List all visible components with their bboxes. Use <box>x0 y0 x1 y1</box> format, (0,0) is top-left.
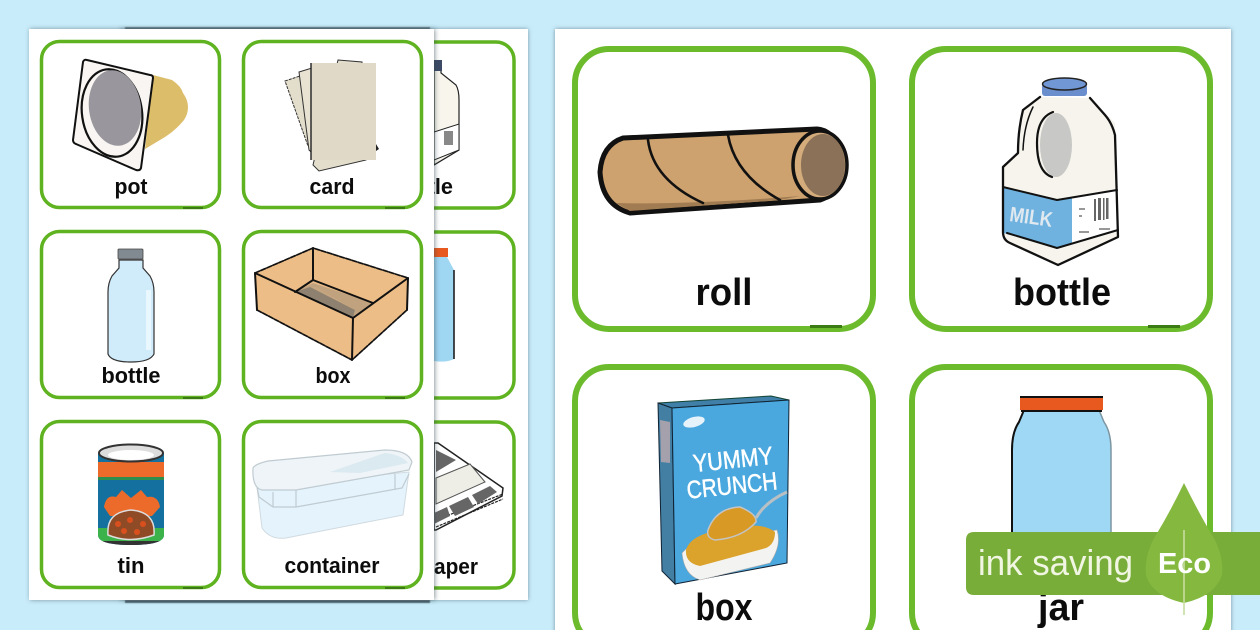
badge: ink saving eco banner <box>966 483 1260 615</box>
card: box <box>244 232 422 399</box>
panel: back sheet of cards: aper <box>434 554 478 579</box>
card: cereal box: YUMMY <box>692 442 775 478</box>
card: cereal box <box>575 367 873 630</box>
card: jar <box>912 367 1210 630</box>
card: bottle: MILK <box>1008 203 1054 232</box>
card: jar: jar <box>1037 587 1084 629</box>
card: container <box>244 422 422 589</box>
card: roll <box>575 49 873 329</box>
panel: front sheet of cards <box>29 29 434 600</box>
icon: eco leaf <box>1146 483 1222 603</box>
card: cereal box: box <box>696 587 752 629</box>
card: card <box>244 42 422 209</box>
badge: ink saving eco banner: ink saving <box>978 542 1133 583</box>
card: bottle: bottle <box>102 363 160 388</box>
panel: back sheet of cards: bottle <box>394 174 453 199</box>
card: tin <box>42 422 220 589</box>
badge: ink saving eco banner: Eco <box>1158 548 1211 580</box>
card: container: container <box>284 553 380 578</box>
panel: back sheet of cards <box>120 27 528 603</box>
card: bottle <box>42 232 220 399</box>
card: card: card <box>310 174 354 199</box>
card: box: box <box>316 363 351 388</box>
card: cereal box: CRUNCH <box>685 467 779 505</box>
card: bottle <box>912 49 1210 329</box>
card: pot <box>42 42 220 209</box>
card: pot: pot <box>114 174 148 199</box>
card: tin: tin <box>118 553 144 578</box>
card: bottle: bottle <box>1013 272 1111 314</box>
panel: right sheet of enlarged cards <box>555 29 1231 630</box>
card: roll: roll <box>696 272 752 314</box>
